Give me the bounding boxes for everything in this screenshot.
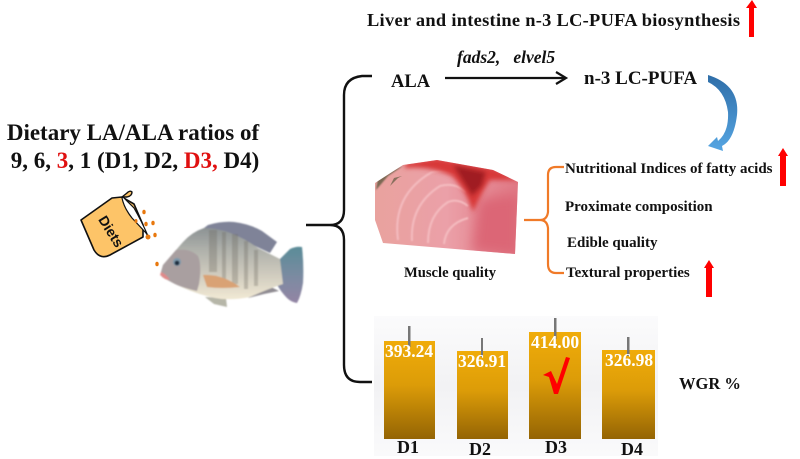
- axis labels: D4: [621, 439, 643, 459]
- bars: [384, 341, 435, 439]
- mouth: [160, 272, 170, 280]
- values: 414.00: [531, 332, 579, 352]
- left main brace: [306, 76, 372, 382]
- pathway: ALA to n-3 LC-PUFA: ALA: [391, 72, 431, 92]
- muscle image: [375, 158, 520, 256]
- pathway: ALA to n-3 LC-PUFA: n-3 LC-PUFA: [584, 68, 697, 89]
- check mark: [543, 357, 570, 394]
- pathway: ALA to n-3 LC-PUFA: [391, 47, 697, 92]
- orange brace: [524, 167, 564, 273]
- eye: [173, 258, 181, 266]
- anal fin: [248, 285, 279, 298]
- dorsal fin: [204, 222, 277, 253]
- values: 326.91: [458, 351, 506, 371]
- arrow: nutritional up: [778, 148, 788, 186]
- arrow: biosynthesis up: [746, 0, 757, 37]
- label: muscle quality: Muscle quality: [404, 265, 497, 281]
- tail: [276, 247, 303, 303]
- values: 326.98: [605, 350, 653, 370]
- heading: dietary ratios: [7, 120, 260, 173]
- label: WGR %: WGR %: [679, 374, 741, 393]
- quality attributes list: Proximate composition: [565, 199, 713, 215]
- quality attributes list: Nutritional Indices of fatty acids: [565, 161, 773, 177]
- body: [161, 228, 283, 299]
- axis labels: D1: [397, 437, 419, 457]
- pectoral fin: [203, 275, 240, 288]
- icon: food pellets: [134, 210, 159, 266]
- heading: dietary ratios: Dietary LA/ALA ratios of: [7, 120, 260, 145]
- values: [385, 332, 653, 371]
- arrow: curved blue: [708, 75, 737, 151]
- icon: diets bag: [81, 191, 159, 266]
- axis labels: D2: [469, 439, 491, 459]
- body bars: [209, 230, 258, 289]
- icon: tilapia fish: [160, 222, 303, 307]
- enzyme labels: fads2, elvel5: [457, 47, 555, 67]
- icon: diets bag: Diets: [95, 213, 127, 250]
- arrow: textural up: [704, 260, 714, 297]
- ventral fin: [205, 297, 227, 307]
- axis labels: D3: [545, 437, 567, 457]
- arrow: conversion: [445, 72, 566, 84]
- quality attributes list: [565, 161, 773, 281]
- quality attributes list: Edible quality: [567, 235, 658, 251]
- axis labels: [397, 437, 643, 459]
- title: biosynthesis: Liver and intestine n-3 LC-PUFA biosynthesis: [367, 10, 740, 30]
- bar chart: WGR: [374, 316, 658, 459]
- head: [161, 250, 200, 291]
- error bars: [408, 318, 630, 357]
- values: 393.24: [385, 341, 433, 361]
- heading: dietary ratios: 9, 6, 3, 1 (D1, D2, D3, D4): [11, 148, 259, 173]
- quality attributes list: Textural properties: [566, 265, 690, 281]
